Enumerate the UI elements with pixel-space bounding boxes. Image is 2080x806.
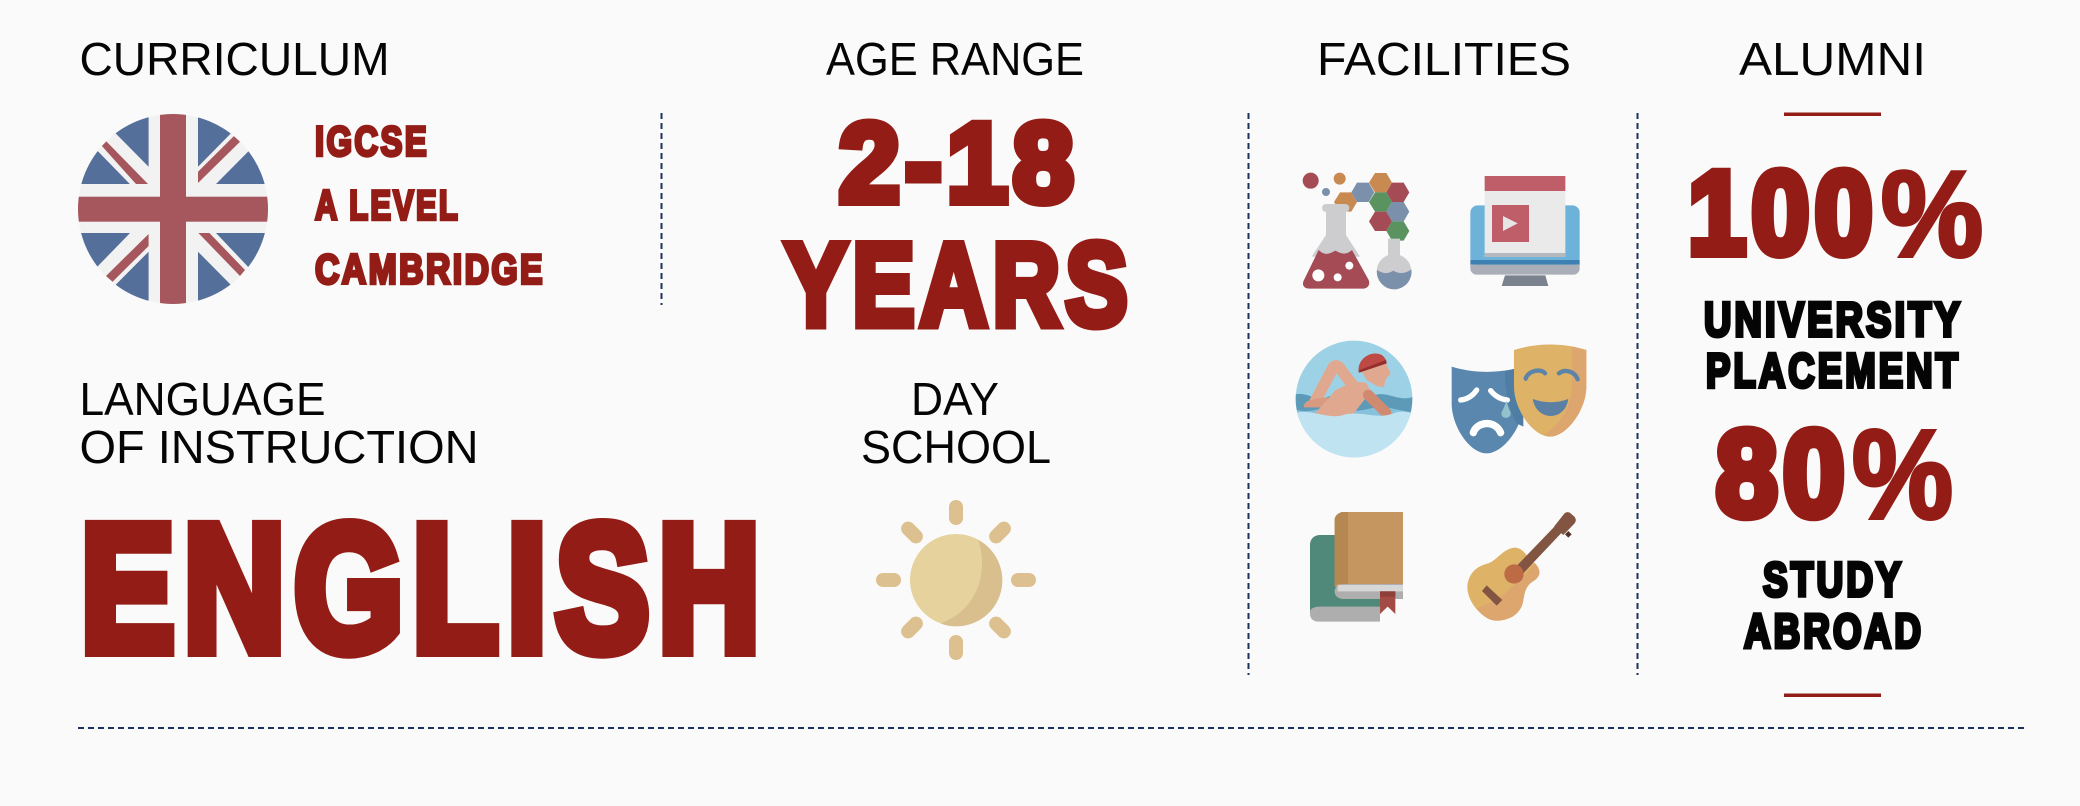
heading: day school [861, 373, 1051, 473]
text: curriculum list: CAMBRIDGE [315, 246, 545, 292]
icon: books [1310, 512, 1403, 622]
heading: facilities: FACILITIES [1317, 33, 1571, 85]
age range value [785, 100, 1133, 350]
icon: theatre masks [1452, 344, 1586, 453]
age range value: 2-18 [839, 100, 1079, 226]
heading: day school: DAY [911, 373, 999, 425]
stat: university placement: PLACEMENT [1706, 345, 1961, 398]
text: curriculum list: IGCSE [315, 118, 429, 164]
icon: guitar [1467, 512, 1576, 621]
stat: study abroad: 80 [1716, 406, 1850, 542]
stat: study abroad: % [1852, 404, 1953, 545]
icon: science flasks [1303, 173, 1412, 289]
stat: university placement: UNIVERSITY [1704, 294, 1963, 347]
heading: day school: SCHOOL [861, 421, 1051, 473]
stat: university placement: % [1881, 146, 1983, 282]
heading: curriculum: CURRICULUM [80, 33, 390, 85]
stat: study abroad [1716, 404, 1953, 658]
text: curriculum list [315, 118, 545, 292]
heading: language of instruction: OF INSTRUCTION [80, 421, 478, 473]
heading: language of instruction [80, 373, 478, 473]
stat: university placement: 100 [1688, 148, 1878, 280]
icon: computer with video [1470, 176, 1580, 286]
stat: study abroad: STUDY [1763, 554, 1904, 607]
stat: study abroad: ABROAD [1744, 606, 1924, 658]
icon: union jack flag [78, 114, 268, 304]
age range value: YEARS [785, 219, 1133, 350]
text: curriculum list: A LEVEL [315, 182, 460, 228]
icon: swimmer [1293, 338, 1415, 460]
stat: university placement [1688, 146, 1983, 398]
heading: alumni: ALUMNI [1739, 33, 1926, 85]
language value: english: ENGLISH [81, 488, 769, 688]
heading: language of instruction: LANGUAGE [80, 373, 326, 425]
heading: age range: AGE RANGE [826, 33, 1084, 85]
icon: sun [876, 500, 1036, 660]
